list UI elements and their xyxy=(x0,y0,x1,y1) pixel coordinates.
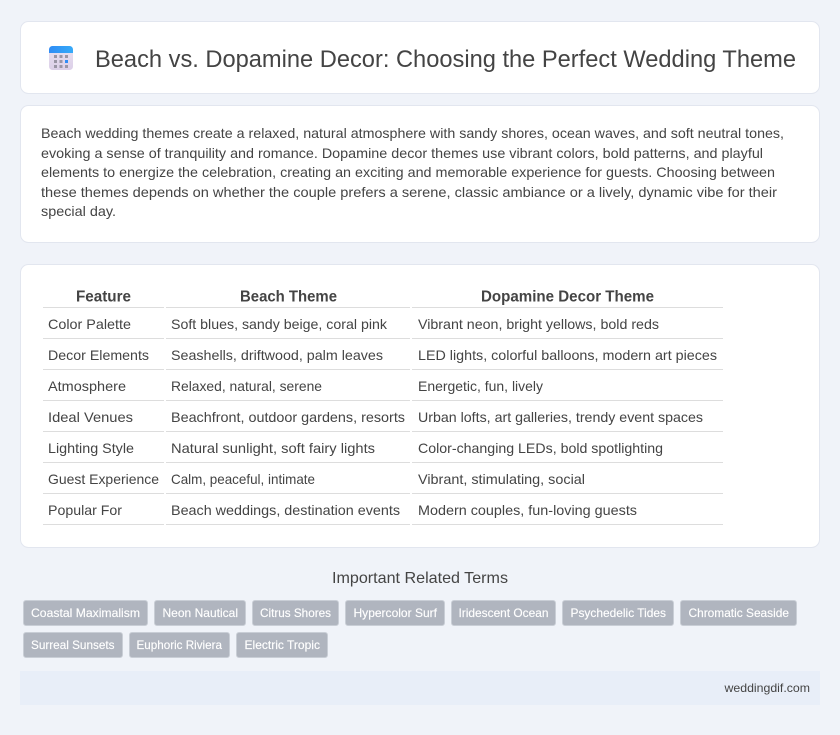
tag xyxy=(130,632,230,658)
row: lighting style: Color-changing LEDs, bold spotlighting xyxy=(418,440,663,456)
intro paragraph: Beach wedding themes create a relaxed, natural atmosphere with sandy shores, ocean waves, and soft neutral tones, xyxy=(41,125,784,141)
table header: Dopamine Decor Theme xyxy=(481,288,654,306)
footer bar xyxy=(20,671,820,705)
tag: Psychedelic Tides xyxy=(570,606,666,620)
tag: Euphoric Riviera xyxy=(136,638,222,652)
header panel xyxy=(20,22,820,94)
row: popular for xyxy=(48,502,637,518)
row: atmosphere: Energetic, fun, lively xyxy=(418,378,543,394)
row: atmosphere: Relaxed, natural, serene xyxy=(171,378,322,394)
row: guest experience xyxy=(48,471,585,487)
table header xyxy=(76,288,654,306)
row: guest experience: Guest Experience xyxy=(48,471,159,487)
row: ideal venues: Ideal Venues xyxy=(48,409,133,425)
table header: Feature xyxy=(76,288,131,306)
row: lighting style: Natural sunlight, soft fairy lights xyxy=(171,440,375,456)
row: ideal venues xyxy=(48,409,703,425)
row: lighting style xyxy=(48,440,663,456)
tag xyxy=(24,600,148,626)
title: Beach vs. Dopamine Decor: Choosing the Perfect Wedding Theme xyxy=(95,46,796,73)
intro paragraph: these themes depends on whether the couple prefers a serene, classic ambiance or a lively, dynamic vibe for their xyxy=(41,184,777,200)
intro paragraph xyxy=(41,125,784,219)
tag xyxy=(562,600,674,626)
row: decor elements xyxy=(48,347,717,363)
footer source: weddingdif.com xyxy=(723,681,810,695)
row: color palette xyxy=(48,316,659,332)
tag: Chromatic Seaside xyxy=(688,606,789,620)
panel: comparison table xyxy=(20,264,820,548)
row: atmosphere xyxy=(48,378,543,394)
heading: related terms: Important Related Terms xyxy=(332,570,508,587)
table header: Beach Theme xyxy=(240,288,337,306)
intro paragraph: elements to energize the celebration, creating an exciting and memorable experience for guests. Choosing between xyxy=(41,164,775,180)
tag: Iridescent Ocean xyxy=(458,606,548,620)
related term tags xyxy=(24,600,796,658)
tag xyxy=(236,632,328,658)
icon: calendar xyxy=(49,46,73,70)
row: lighting style: Lighting Style xyxy=(48,440,134,456)
panel: introduction xyxy=(20,106,820,242)
intro paragraph: evoking a sense of tranquility and romance. Dopamine decor themes use vibrant colors, bold patterns, and playful xyxy=(41,145,763,161)
row: color palette: Vibrant neon, bright yellows, bold reds xyxy=(418,316,659,332)
row: decor elements: Seashells, driftwood, palm leaves xyxy=(171,347,383,363)
intro paragraph: special day. xyxy=(41,203,116,219)
row: ideal venues: Urban lofts, art galleries, trendy event spaces xyxy=(418,409,703,425)
row: color palette: Color Palette xyxy=(48,316,131,332)
row: popular for: Modern couples, fun-loving guests xyxy=(418,502,637,518)
row: ideal venues: Beachfront, outdoor gardens, resorts xyxy=(171,409,405,425)
row: decor elements: LED lights, colorful balloons, modern art pieces xyxy=(418,347,717,363)
tag xyxy=(252,600,338,626)
row: guest experience: Calm, peaceful, intimate xyxy=(171,471,315,487)
tag: Hypercolor Surf xyxy=(354,606,438,620)
tag xyxy=(452,600,556,626)
tag xyxy=(346,600,444,626)
tag: Neon Nautical xyxy=(162,606,238,620)
tag xyxy=(680,600,796,626)
tag: Electric Tropic xyxy=(244,638,320,652)
tag xyxy=(24,632,122,658)
tag: Coastal Maximalism xyxy=(31,606,140,620)
row: color palette: Soft blues, sandy beige, coral pink xyxy=(171,316,388,332)
tag xyxy=(154,600,246,626)
row: atmosphere: Atmosphere xyxy=(48,378,126,394)
row: popular for: Beach weddings, destination events xyxy=(171,502,400,518)
tag: Surreal Sunsets xyxy=(31,638,114,652)
row: decor elements: Decor Elements xyxy=(48,347,149,363)
row: guest experience: Vibrant, stimulating, social xyxy=(418,471,585,487)
row: popular for: Popular For xyxy=(48,502,122,518)
tag: Citrus Shores xyxy=(260,606,331,620)
